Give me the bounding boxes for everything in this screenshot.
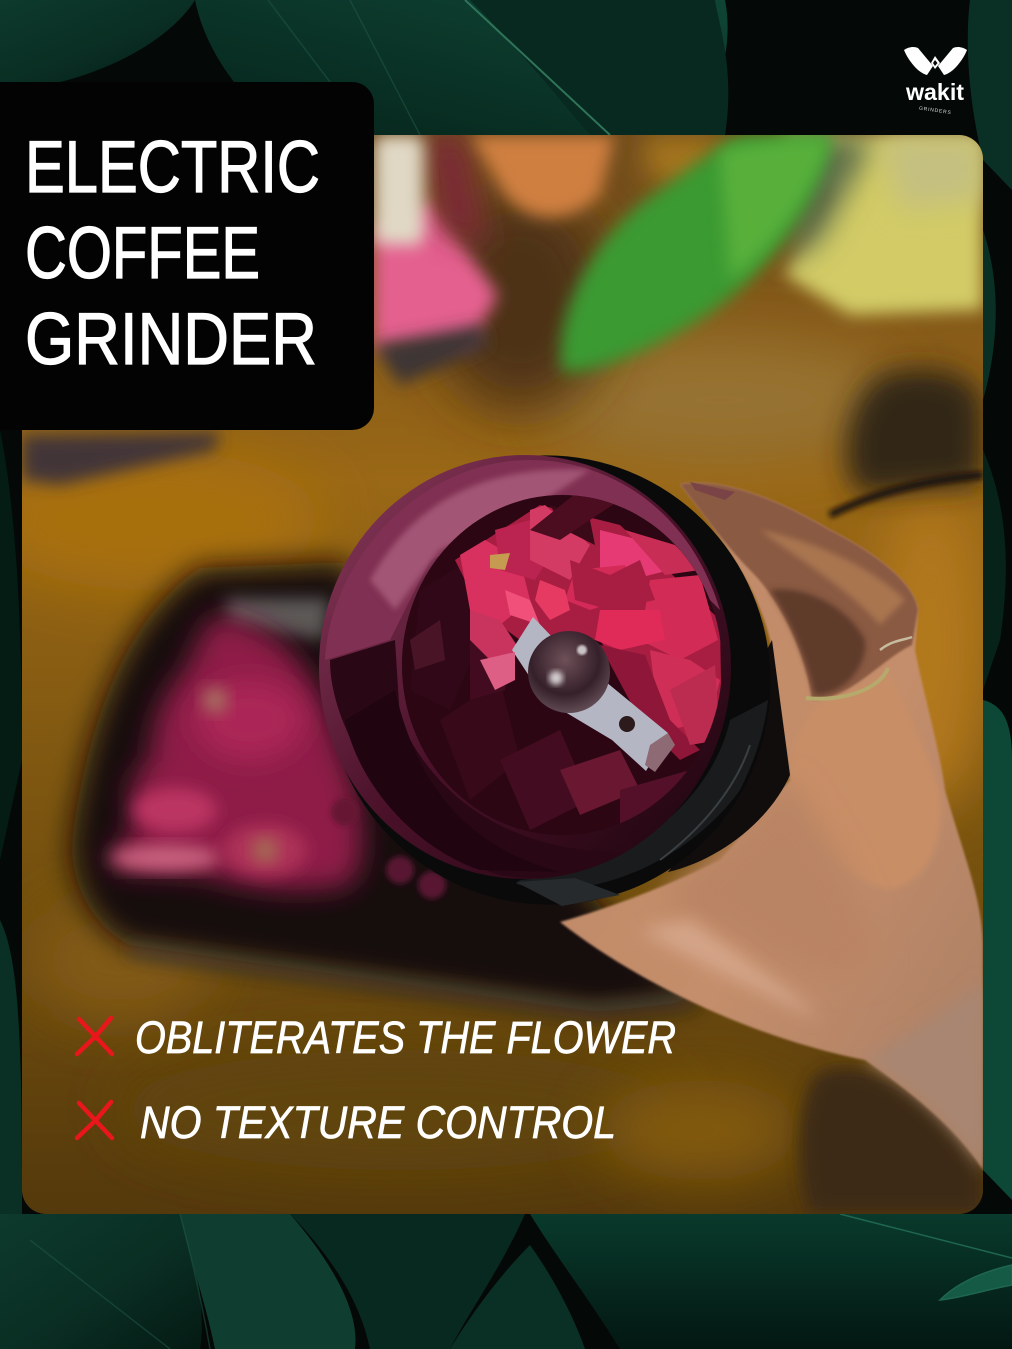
title: GRINDER [25,299,317,380]
title: ELECTRIC [25,127,320,208]
title: COFFEE [25,213,260,294]
bright petals upper right [455,490,722,760]
ball nut [528,631,610,713]
panel: photo of electric grinder [0,135,990,1214]
photo: blurred tray with petals [72,562,705,1012]
photo: blurred background objects [22,135,983,1214]
logo: wakit grinders: GRINDERS [919,106,952,116]
logo: wakit grinders: wakit [905,79,964,105]
rings on fingers [806,637,912,699]
item: no texture control: NO TEXTURE CONTROL [140,1097,616,1148]
title [25,127,320,380]
grinder: black lid rim [344,455,768,906]
grinder: rose petals and blade [400,490,730,835]
grinder: powder-coated interior [319,455,731,879]
blade [480,617,675,772]
photo: hand holding grinder [560,482,983,1170]
dark petals lower left [400,495,730,835]
item: obliterates the flower: OBLITERATES THE FLOWER [135,1012,676,1063]
photo: blurred wooden table [0,135,990,1214]
title box [0,82,374,430]
logo: wakit grinders [904,47,967,116]
list: drawbacks [77,1012,676,1148]
